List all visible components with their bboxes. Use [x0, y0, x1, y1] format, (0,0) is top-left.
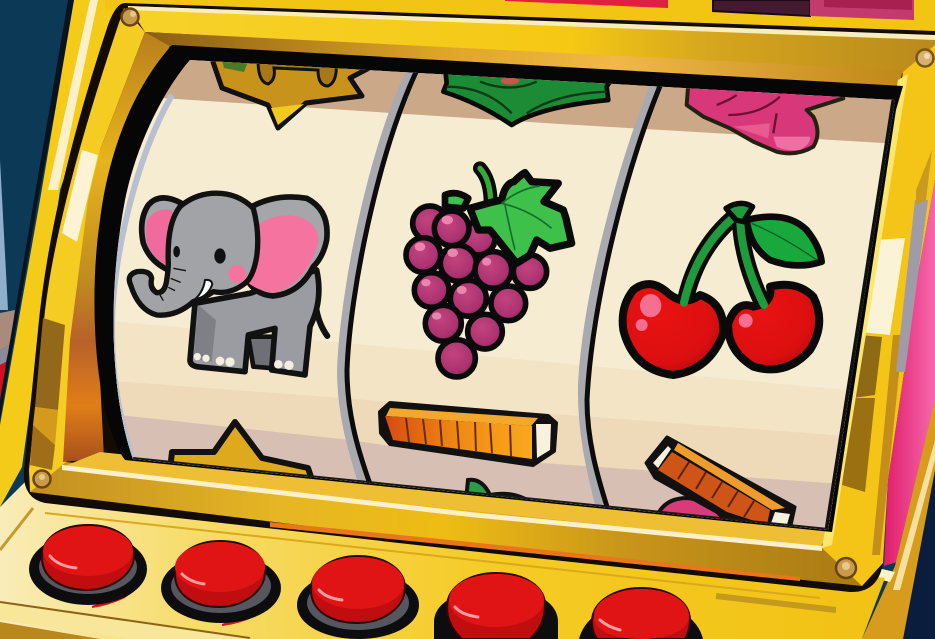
left gold strip — [0, 0, 125, 507]
peach band above bottom shadow — [116, 382, 843, 530]
top leaf symbol — [443, 67, 610, 125]
lower panel — [0, 482, 885, 639]
top shadow band — [164, 60, 895, 144]
gold trim bottom right — [862, 400, 935, 639]
left cherry — [623, 284, 723, 375]
elephant symbol — [129, 193, 327, 375]
elephant head and trunk — [129, 193, 258, 315]
bolt bottom left — [34, 470, 50, 488]
bevel bottom white line — [62, 465, 822, 551]
cherry highlights — [640, 294, 661, 317]
elephant cheek — [228, 265, 246, 283]
top star symbol — [213, 58, 373, 128]
left light stripe — [0, 160, 8, 310]
frame right rail — [822, 45, 935, 586]
top flower symbol — [687, 83, 843, 153]
middle bar symbol — [380, 403, 556, 465]
right rail top shadow — [916, 150, 932, 205]
bottom star symbol — [170, 422, 312, 480]
frame left rail — [29, 8, 145, 492]
navy corner — [903, 470, 935, 639]
black window border — [94, 45, 903, 532]
button 1 — [29, 525, 147, 608]
left rail bronze block — [35, 318, 65, 410]
elephant body — [190, 270, 319, 375]
elephant left ear — [142, 198, 182, 270]
elephant tusk — [195, 280, 212, 299]
right rail gold trim — [872, 335, 903, 555]
cherry stems — [685, 213, 738, 302]
left strip cream highlight — [48, 0, 98, 190]
grape small leaf — [445, 193, 468, 208]
bottom reel edge — [133, 459, 828, 530]
bottom shadow band — [122, 416, 836, 530]
left silver reel edge — [112, 95, 172, 459]
right rail bronze block lower — [842, 398, 875, 492]
left rail bottom block — [30, 425, 55, 470]
left outer black edge — [0, 0, 76, 420]
left cabinet sliver — [0, 310, 15, 410]
frame top highlight — [128, 6, 935, 40]
right reel dark edge — [828, 100, 895, 530]
panel left groove — [0, 508, 33, 550]
bolt top right — [916, 50, 934, 66]
elephant toes — [194, 353, 294, 370]
button 2 — [161, 541, 281, 626]
right cherry — [728, 285, 819, 369]
right silver strip — [896, 200, 928, 372]
elephant whiskers — [160, 268, 186, 301]
button 5 — [579, 588, 703, 639]
reels window — [100, 50, 900, 540]
frame bottom rail — [30, 462, 862, 586]
bolt bottom right — [836, 558, 856, 578]
frame bottom orange line — [270, 522, 800, 581]
bolt top left — [122, 8, 138, 26]
cherries symbol — [623, 203, 822, 375]
left rail cream panel — [62, 150, 98, 242]
grape highlights — [415, 216, 491, 320]
bevel bottom — [62, 452, 830, 548]
grape stem — [480, 168, 491, 203]
elephant inner leg — [248, 337, 275, 368]
pink cabinet side — [884, 175, 935, 566]
bevel right highlight — [822, 74, 908, 548]
panel engraved line — [716, 596, 836, 610]
left rail lower block — [33, 407, 58, 445]
left reel separator — [341, 72, 416, 484]
cherry leaf — [747, 217, 822, 265]
bevel left — [63, 32, 170, 462]
button 4 — [434, 573, 558, 639]
panel trim line — [0, 602, 250, 638]
elephant right ear — [248, 197, 327, 296]
panel thin line — [45, 513, 820, 598]
light peach band — [114, 322, 850, 530]
bottom pink symbol — [657, 498, 726, 522]
grape bunch — [406, 206, 547, 377]
right bar symbol — [646, 437, 795, 535]
panel lower trim — [0, 603, 250, 639]
right rail cream panel — [860, 238, 905, 335]
right reel separator — [582, 85, 660, 510]
elephant tail — [316, 307, 327, 336]
frame top rail — [128, 6, 935, 75]
top marquee red light — [505, 0, 668, 8]
button 3 — [297, 556, 419, 639]
panel trim shadow — [0, 622, 100, 639]
elephant far leg shading — [193, 305, 216, 362]
top marquee dark window — [713, 0, 914, 20]
grape main leaf — [470, 173, 572, 263]
reel base — [100, 50, 900, 540]
elephant eyes — [173, 246, 180, 257]
top marquee gold — [105, 0, 935, 40]
right rail bronze block upper — [853, 335, 882, 398]
bottom leaf symbol — [466, 480, 535, 505]
bevel top — [145, 32, 903, 90]
cherry stem greens — [684, 213, 738, 303]
grapes symbol — [406, 168, 572, 377]
